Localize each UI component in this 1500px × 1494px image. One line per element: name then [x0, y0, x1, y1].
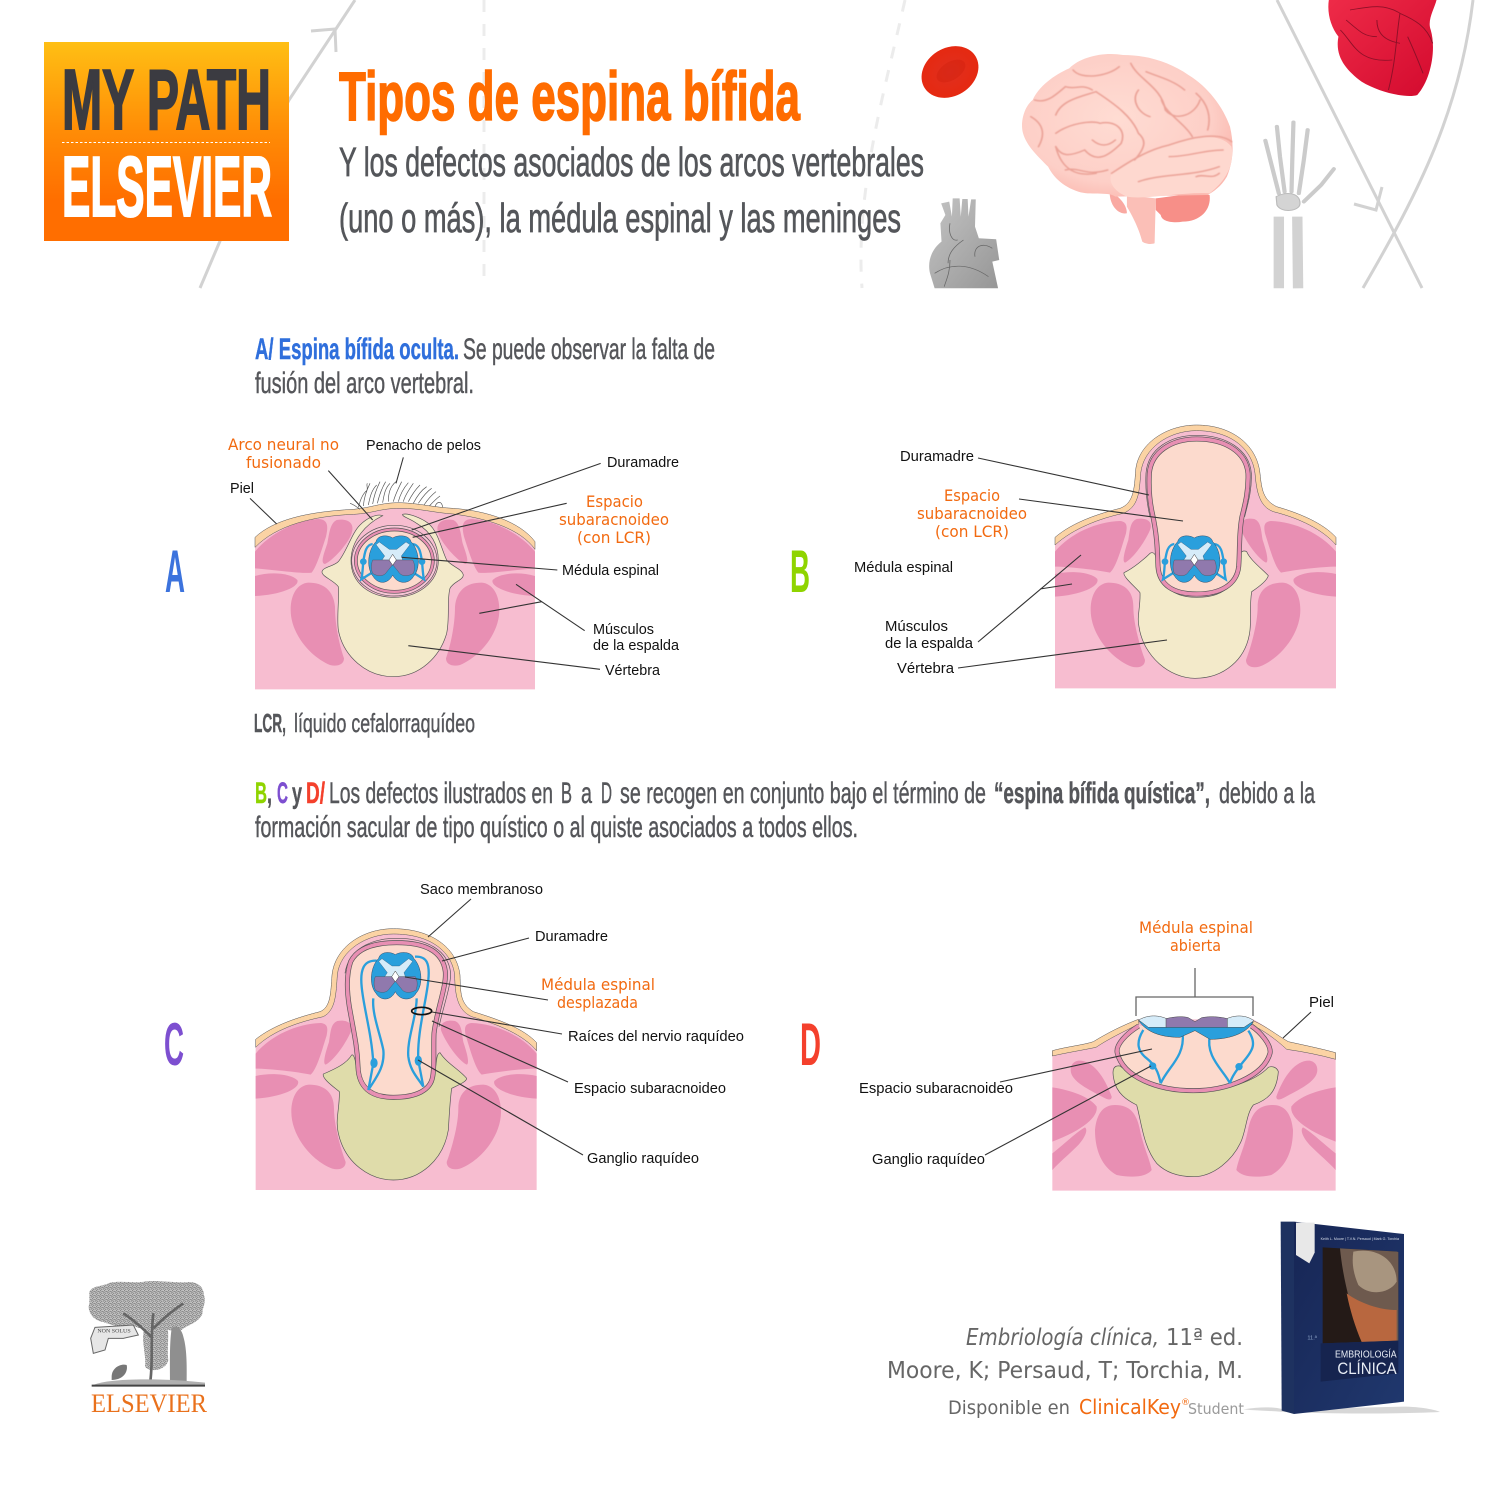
paragraph: B, C y D description [255, 777, 1315, 844]
text: B [790, 538, 810, 605]
citation: Embriología clínica, [966, 1325, 1159, 1351]
body tissue C [256, 929, 537, 1190]
citation: ClinicalKey [1079, 1395, 1181, 1419]
diagram D: mielosquisis [1052, 1016, 1336, 1191]
paragraph: B, C y D description: , [267, 777, 272, 810]
heading: A description: fusión del arco vertebral. [255, 367, 474, 400]
back muscles A [255, 519, 535, 666]
nerve roots D [1139, 1030, 1253, 1083]
book title: EMBRIOLOGÍA [1335, 1349, 1397, 1360]
labels B: Médula espinal [854, 559, 953, 576]
tree crown [89, 1281, 205, 1331]
note: LCR abbreviation: líquido cefalorraquídeo [294, 708, 475, 738]
paragraph: B, C y D description: a [581, 777, 592, 810]
icon: brain [1022, 54, 1233, 244]
open spinal cord plate D [1139, 1016, 1254, 1039]
vertebra A [322, 514, 463, 677]
labels C: Duramadre [535, 928, 608, 945]
labels B: de la espalda [885, 635, 974, 652]
wordmark: Elsevier: ELSEVIER [91, 1389, 208, 1418]
labels A: fusionado [246, 453, 321, 472]
dural sac C [347, 943, 445, 1097]
header decorative route lines [200, 0, 1473, 288]
citation: Disponible en [948, 1397, 1070, 1419]
vertebra B [1124, 551, 1268, 678]
back muscles D [1052, 1061, 1336, 1177]
labels C: Saco membranoso [420, 881, 543, 898]
skin B [1055, 425, 1336, 545]
paragraph: B, C y D description: B [561, 777, 572, 810]
logo: My Path Elsevier: MY PATH [62, 53, 271, 148]
body tissue A [255, 503, 535, 689]
book authors: Keith L. Moore | T.V.N. Persaud | Mark G. Torchia [1321, 1237, 1400, 1241]
back muscles C [256, 1021, 537, 1169]
labels C [420, 881, 744, 1167]
labels B: Músculos [885, 618, 948, 635]
labels C: Médula espinal [541, 975, 655, 994]
logo: My Path Elsevier [44, 42, 289, 241]
dural sac A [352, 525, 437, 596]
diagram C: mielomeningocele [256, 929, 537, 1190]
labels C: Raíces del nervio raquídeo [568, 1028, 744, 1045]
labels B: Vértebra [897, 660, 955, 677]
labels A: (con LCR) [577, 528, 651, 547]
logo: My Path Elsevier: ELSEVIER [62, 140, 272, 235]
citation: 11ª ed. [1166, 1325, 1243, 1351]
icon: grey anatomical heart [929, 198, 999, 288]
dural sac B [1149, 439, 1248, 594]
back muscles B [1055, 519, 1336, 667]
labels B: subaracnoideo [917, 504, 1027, 523]
spinal cord C [371, 952, 421, 999]
body tissue B [1055, 425, 1336, 688]
labels D: Ganglio raquídeo [872, 1151, 985, 1168]
spinal cord B [1162, 536, 1227, 582]
skin C [256, 929, 537, 1051]
banner: NON SOLUS [97, 1330, 131, 1335]
note: LCR abbreviation: LCR, [254, 708, 286, 738]
book cover [1243, 1222, 1440, 1414]
icon: red blood cell [912, 36, 988, 108]
leader lines A [250, 457, 601, 669]
citation [887, 1325, 1244, 1419]
book edition: 11.ª [1307, 1334, 1318, 1341]
labels D: Espacio subaracnoideo [859, 1080, 1013, 1097]
icon: red heart [1328, 0, 1437, 96]
leader lines B [958, 458, 1183, 668]
leader lines C [405, 899, 583, 1155]
book title: CLÍNICA [1337, 1359, 1397, 1378]
heading: A description: Se puede observar la falta de [463, 333, 715, 366]
bracket: open cord [1136, 968, 1253, 1016]
citation: Moore, K; Persaud, T; Torchia, M. [887, 1358, 1243, 1384]
vertebra D [1113, 1066, 1278, 1177]
citation: ® [1181, 1398, 1190, 1408]
dural sac D [1117, 1026, 1270, 1091]
labels A: de la espalda [593, 637, 680, 654]
paragraph: B, C y D description: D/ [306, 777, 325, 810]
labels C: Espacio subaracnoideo [574, 1080, 726, 1097]
spinal cord A [360, 536, 425, 582]
icon: hand and forearm skeleton [1265, 122, 1334, 288]
skin A [255, 503, 535, 549]
paragraph: B, C y D description: D [601, 777, 612, 810]
heading: A description: A/ Espina bífida oculta. [255, 333, 459, 366]
title: Tipos de espina bífida [339, 58, 800, 135]
labels C: desplazada [557, 993, 638, 1012]
text: A [165, 538, 185, 605]
book spine [1281, 1222, 1294, 1414]
logo: Elsevier tree [89, 1281, 205, 1386]
labels B [854, 448, 1027, 677]
labels B: Duramadre [900, 448, 974, 465]
labels D: Piel [1309, 994, 1334, 1011]
book title band [1321, 1341, 1398, 1382]
heading: A description [255, 333, 715, 400]
text: D [800, 1011, 821, 1078]
subtitle [339, 139, 924, 241]
labels D: Médula espinal [1139, 918, 1253, 937]
vertebra C [323, 1053, 467, 1180]
nerve root marker [412, 1007, 432, 1015]
labels A: Músculos [593, 621, 654, 638]
labels B: (con LCR) [935, 522, 1009, 541]
labels D [859, 918, 1334, 1168]
labels C: Ganglio raquídeo [587, 1150, 699, 1167]
nerve roots C [361, 957, 429, 1090]
book title [1335, 1349, 1397, 1378]
paragraph: B, C y D description: debido a la [1219, 777, 1315, 810]
labels A: Piel [230, 480, 254, 497]
labels A: Espacio [586, 492, 643, 511]
citation: Student [1188, 1400, 1244, 1418]
labels A: Penacho de pelos [366, 437, 481, 454]
figure [170, 1326, 187, 1382]
outer membrane B [1146, 435, 1251, 517]
diagram B: meningocele [1055, 425, 1336, 688]
labels A: Arco neural no [228, 435, 339, 454]
book front [1294, 1222, 1404, 1414]
labels A: Duramadre [607, 454, 679, 471]
digital version flag [1296, 1223, 1315, 1263]
paragraph: B, C y D description: Los defectos ilustrados en [329, 777, 553, 810]
paragraph: B, C y D description: “espina bífida quística”, [994, 777, 1210, 810]
labels A: Vértebra [605, 662, 661, 679]
leader lines D [985, 1012, 1311, 1155]
note: LCR abbreviation [254, 708, 475, 738]
paragraph: B, C y D description: formación sacular de tipo quístico o al quiste asociados a todos ellos. [255, 811, 858, 844]
paragraph: B, C y D description: y [292, 777, 302, 810]
labels A: Médula espinal [562, 562, 659, 579]
body tissue D [1052, 1019, 1336, 1191]
paragraph: B, C y D description: C [277, 777, 288, 810]
labels B: Espacio [944, 486, 1000, 505]
text: C [164, 1011, 184, 1078]
paragraph: B, C y D description: se recogen en conjunto bajo el término de [620, 777, 986, 810]
hair tuft A [350, 482, 443, 509]
subtitle: Y los defectos asociados de los arcos vertebrales [339, 139, 924, 185]
cover image [1323, 1247, 1398, 1343]
skin D [1052, 1019, 1336, 1059]
labels D: abierta [1170, 936, 1221, 955]
paragraph: B, C y D description: B [255, 777, 267, 810]
labels A [228, 435, 680, 679]
labels A: subaracnoideo [559, 510, 669, 529]
book shadow [1243, 1407, 1440, 1413]
diagram A: espina bífida oculta [250, 457, 601, 689]
outer membrane C [345, 938, 451, 1027]
subtitle: (uno o más), la médula espinal y las meninges [339, 195, 901, 241]
